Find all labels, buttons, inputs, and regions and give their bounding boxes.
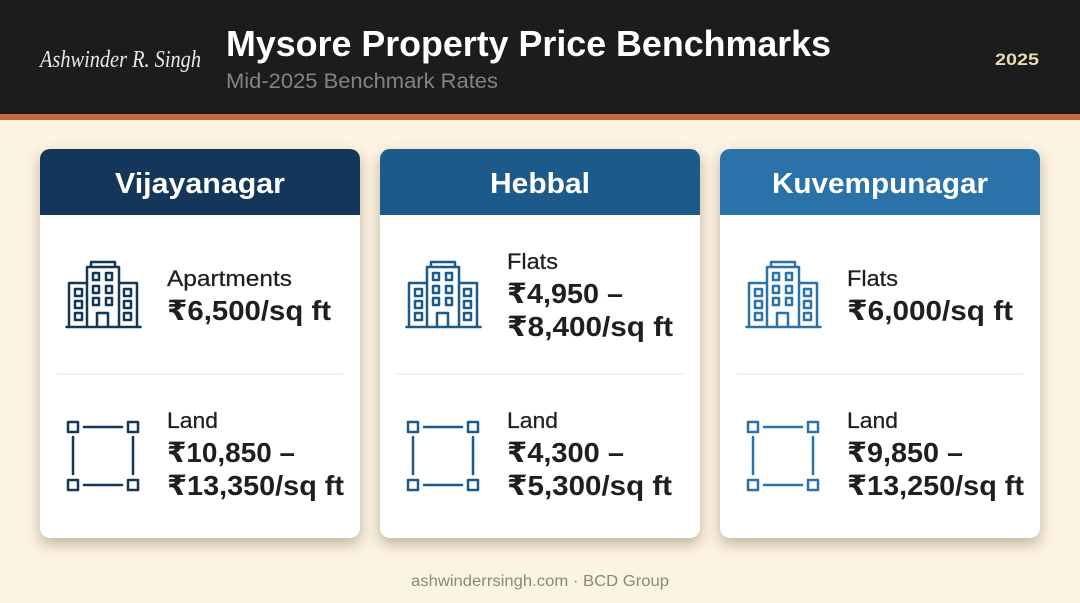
signature: Ashwinder R. Singh <box>38 47 201 73</box>
icon: land plot <box>68 422 138 490</box>
panel header: Vijayanagar: Vijayanagar <box>115 168 285 200</box>
footer: ashwinderrsingh.com · BCD Group <box>411 573 669 590</box>
flats label: Flats <box>507 249 558 274</box>
flats label: Flats <box>847 266 898 291</box>
land price: ₹13,250/sq ft <box>847 470 1024 501</box>
panel: Kuvempunagar <box>720 149 1040 538</box>
land label: Land <box>847 408 898 433</box>
panel header: Kuvempunagar: Kuvempunagar <box>772 168 988 200</box>
icon: apartment building <box>746 262 820 327</box>
title: Mysore Property Price Benchmarks <box>226 23 831 64</box>
panel: Hebbal <box>380 149 700 538</box>
panel header: Kuvempunagar <box>720 149 1040 215</box>
land price: ₹4,300 – <box>507 437 624 468</box>
land price: ₹9,850 – <box>847 437 963 468</box>
accent bar <box>0 114 1080 120</box>
land price <box>167 437 344 501</box>
land price <box>507 437 672 501</box>
land price <box>847 437 1024 501</box>
land label: Land <box>167 408 218 433</box>
year: 2025 <box>995 50 1039 69</box>
panel header: Hebbal <box>380 149 700 215</box>
panel: Vijayanagar <box>40 149 360 538</box>
flats price: ₹4,950 – <box>507 278 623 309</box>
land price: ₹5,300/sq ft <box>507 470 672 501</box>
land price: ₹13,350/sq ft <box>167 470 344 501</box>
apartments label: Apartments <box>167 266 292 291</box>
subtitle: Mid-2025 Benchmark Rates <box>226 70 498 93</box>
icon: apartment building <box>406 262 480 327</box>
icon: apartment building <box>66 262 140 327</box>
land price: ₹10,850 – <box>167 437 295 468</box>
apartments price: ₹6,500/sq ft <box>167 295 331 326</box>
icon: land plot <box>408 422 478 490</box>
header band <box>0 0 1080 120</box>
flats price: ₹6,000/sq ft <box>847 295 1013 326</box>
icon: land plot <box>748 422 818 490</box>
panel header: Hebbal: Hebbal <box>490 168 590 200</box>
flats price <box>507 278 673 342</box>
land label: Land <box>507 408 558 433</box>
flats price: ₹8,400/sq ft <box>507 311 673 342</box>
panel header: Vijayanagar <box>40 149 360 215</box>
